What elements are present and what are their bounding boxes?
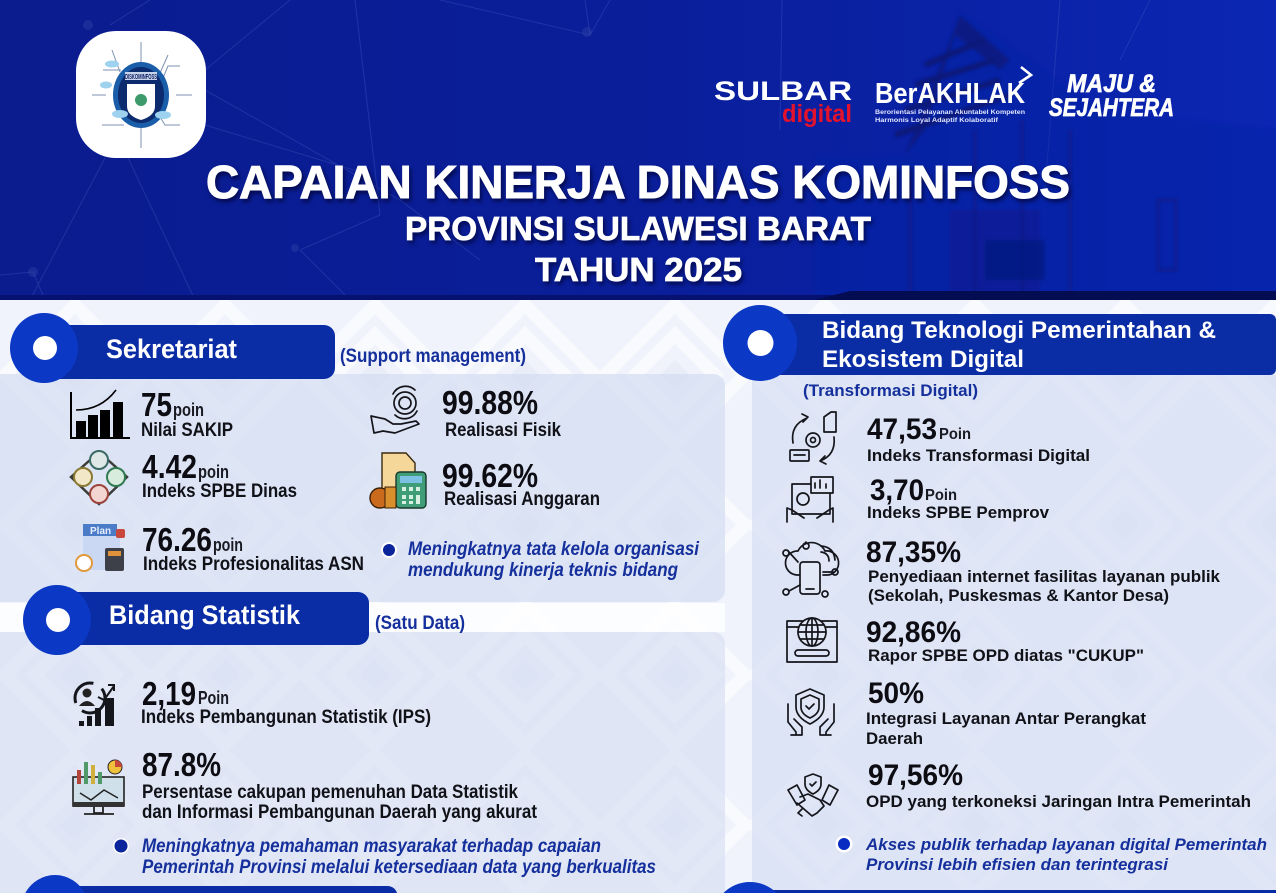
sekretariat subtitle: (Support management) — [340, 346, 526, 367]
stat: penyediaan internet: 87,35% — [866, 536, 961, 569]
logo badge text: DISKOMINFOSS — [125, 74, 157, 81]
stat: indeks profesionalitas asn: poin — [213, 535, 243, 555]
callout: teknologi outcome: Akses publik terhadap layanan digital Pemerintah — [865, 835, 1267, 854]
sekretariat heading — [10, 313, 335, 383]
icon: bar chart growth — [71, 390, 130, 438]
page background pattern — [0, 300, 1276, 893]
icon: hand with gear — [371, 386, 419, 433]
icon: plan document — [76, 524, 125, 571]
stat: indeks spbe pemprov: 3,70 — [870, 474, 924, 507]
stat: nilai sakip — [141, 386, 233, 441]
stat: indeks profesionalitas asn — [142, 521, 364, 575]
stat: persentase data statistik: Persentase cakupan pemenuhan Data Statistik — [142, 781, 518, 803]
stat: integrasi layanan — [866, 677, 1146, 748]
stat: indeks spbe pemprov — [867, 474, 1050, 522]
icon: cloud network phone — [783, 542, 839, 597]
sulbar digital logo: digital — [782, 100, 852, 128]
icon: browser globe — [787, 618, 837, 662]
stat: opd terkoneksi — [866, 759, 1251, 811]
icon: person with stat bars — [75, 683, 114, 726]
stat: rapor spbe opd: Rapor SPBE OPD diatas "CUKUP" — [868, 646, 1144, 665]
stat: nilai sakip: Nilai SAKIP — [141, 419, 233, 441]
icon: budget calculator — [370, 453, 426, 508]
stat: indeks transformasi digital: Indeks Transformasi Digital — [867, 446, 1090, 465]
stat: integrasi layanan: Integrasi Layanan Antar Perangkat — [866, 709, 1146, 728]
header banner — [0, 0, 1276, 300]
next section heading: right, cropped — [723, 882, 1276, 893]
stat: rapor spbe opd: 92,86% — [866, 616, 961, 649]
stat: indeks profesionalitas asn: 76.26 — [142, 521, 212, 558]
stat: realisasi anggaran — [442, 457, 600, 510]
icon: monitor dashboard — [73, 760, 124, 814]
stat: nilai sakip: poin — [173, 400, 204, 420]
stat: rapor spbe opd — [866, 616, 1144, 665]
teknologi subtitle: (Transformasi Digital) — [803, 381, 978, 400]
stat: realisasi fisik — [442, 384, 561, 441]
stat: indeks pembangunan statistik: Poin — [198, 688, 229, 708]
callout: teknologi outcome: Provinsi lebih efisien dan terintegrasi — [866, 855, 1169, 874]
title: PROVINSI SULAWESI BARAT — [405, 210, 871, 247]
sulbar digital logo — [714, 76, 852, 128]
stat: opd terkoneksi: OPD yang terkoneksi Jaringan Intra Pemerintah — [866, 792, 1251, 811]
icon: digital transformation — [790, 412, 836, 464]
icon: tablet with hands — [787, 477, 833, 522]
stat: nilai sakip: 75 — [141, 386, 172, 423]
stat: indeks spbe dinas: Indeks SPBE Dinas — [142, 480, 297, 502]
panel: bidang teknologi pemerintahan — [723, 305, 1276, 893]
berakhlak logo: Harmonis Loyal Adaptif Kolaboratif — [875, 117, 999, 124]
callout: statistik outcome: Pemerintah Provinsi melalui ketersediaan data yang berkualitas — [142, 856, 656, 878]
sulbar digital logo: SULBAR — [714, 76, 852, 106]
sekretariat heading: Sekretariat — [106, 334, 237, 364]
stat: indeks spbe pemprov: Indeks SPBE Pemprov — [867, 503, 1050, 522]
callout: sekretariat outcome — [381, 538, 700, 581]
teknologi heading: Bidang Teknologi Pemerintahan & — [822, 317, 1216, 344]
stat: penyediaan internet — [866, 536, 1221, 605]
callout: statistik outcome — [113, 835, 656, 878]
statistik heading — [23, 585, 369, 655]
icon: handshake with shield — [788, 774, 838, 816]
title — [206, 156, 1070, 288]
stat: integrasi layanan: Daerah — [866, 729, 923, 748]
stat: integrasi layanan: 50% — [868, 677, 924, 710]
logo badge — [76, 31, 206, 158]
icon: shield in hands — [788, 689, 834, 735]
stat: penyediaan internet: Penyediaan internet fasilitas layanan publik — [868, 567, 1221, 586]
stat: realisasi fisik: 99.88% — [442, 384, 538, 421]
stat: indeks spbe dinas: poin — [198, 462, 229, 482]
callout: sekretariat outcome: Meningkatnya tata kelola organisasi — [408, 538, 700, 560]
stat: indeks profesionalitas asn: Indeks Profesionalitas ASN — [143, 553, 364, 575]
stat: realisasi anggaran: Realisasi Anggaran — [444, 488, 600, 510]
maju dan sejahtera logo: SEJAHTERA — [1049, 94, 1174, 122]
stat: indeks pembangunan statistik — [141, 675, 431, 728]
callout: teknologi outcome — [836, 835, 1267, 874]
stat: realisasi anggaran: 99.62% — [442, 457, 538, 494]
icon: people network — [71, 451, 127, 504]
maju dan sejahtera logo — [1049, 70, 1174, 122]
statistik heading: Bidang Statistik — [109, 600, 301, 630]
panel: bidang statistik — [0, 585, 725, 893]
maju dan sejahtera logo: MAJU & — [1067, 70, 1156, 98]
berakhlak logo: BerAKHLAK — [875, 78, 1025, 110]
stat: indeks pembangunan statistik: Indeks Pembangunan Statistik (IPS) — [141, 706, 431, 728]
teknologi heading: Ekosistem Digital — [822, 346, 1024, 373]
title: TAHUN 2025 — [535, 251, 742, 288]
teknologi heading — [723, 305, 1276, 381]
stat: persentase data statistik: 87.8% — [142, 746, 221, 783]
stat: indeks transformasi digital: 47,53 — [867, 413, 937, 446]
stat: indeks spbe dinas: 4.42 — [142, 448, 197, 485]
next section heading: left, cropped — [25, 875, 397, 893]
stat: indeks spbe dinas — [142, 448, 297, 502]
panel: sekretariat — [0, 313, 725, 602]
stat: indeks transformasi digital: Poin — [939, 426, 971, 443]
callout: sekretariat outcome: mendukung kinerja teknis bidang — [408, 559, 678, 581]
stat: penyediaan internet: (Sekolah, Puskesmas & Kantor Desa) — [868, 586, 1169, 605]
stat: indeks transformasi digital — [867, 413, 1090, 465]
stat: opd terkoneksi: 97,56% — [868, 759, 963, 792]
stat: realisasi fisik: Realisasi Fisik — [445, 419, 561, 441]
statistik subtitle: (Satu Data) — [375, 613, 465, 634]
icon: plan document: Plan — [90, 526, 111, 537]
title: CAPAIAN KINERJA DINAS KOMINFOSS — [206, 156, 1070, 208]
stat: indeks spbe pemprov: Poin — [925, 487, 957, 504]
berakhlak logo: Berorientasi Pelayanan Akuntabel Kompeten — [875, 109, 1025, 116]
berakhlak logo — [875, 67, 1031, 124]
stat: indeks pembangunan statistik: 2,19 — [142, 675, 196, 712]
callout: statistik outcome: Meningkatnya pemahaman masyarakat terhadap capaian — [142, 835, 601, 857]
stat: persentase data statistik — [142, 746, 537, 823]
building silhouette — [815, 10, 1276, 295]
stat: persentase data statistik: dan Informasi Pembangunan Daerah yang akurat — [142, 801, 537, 823]
